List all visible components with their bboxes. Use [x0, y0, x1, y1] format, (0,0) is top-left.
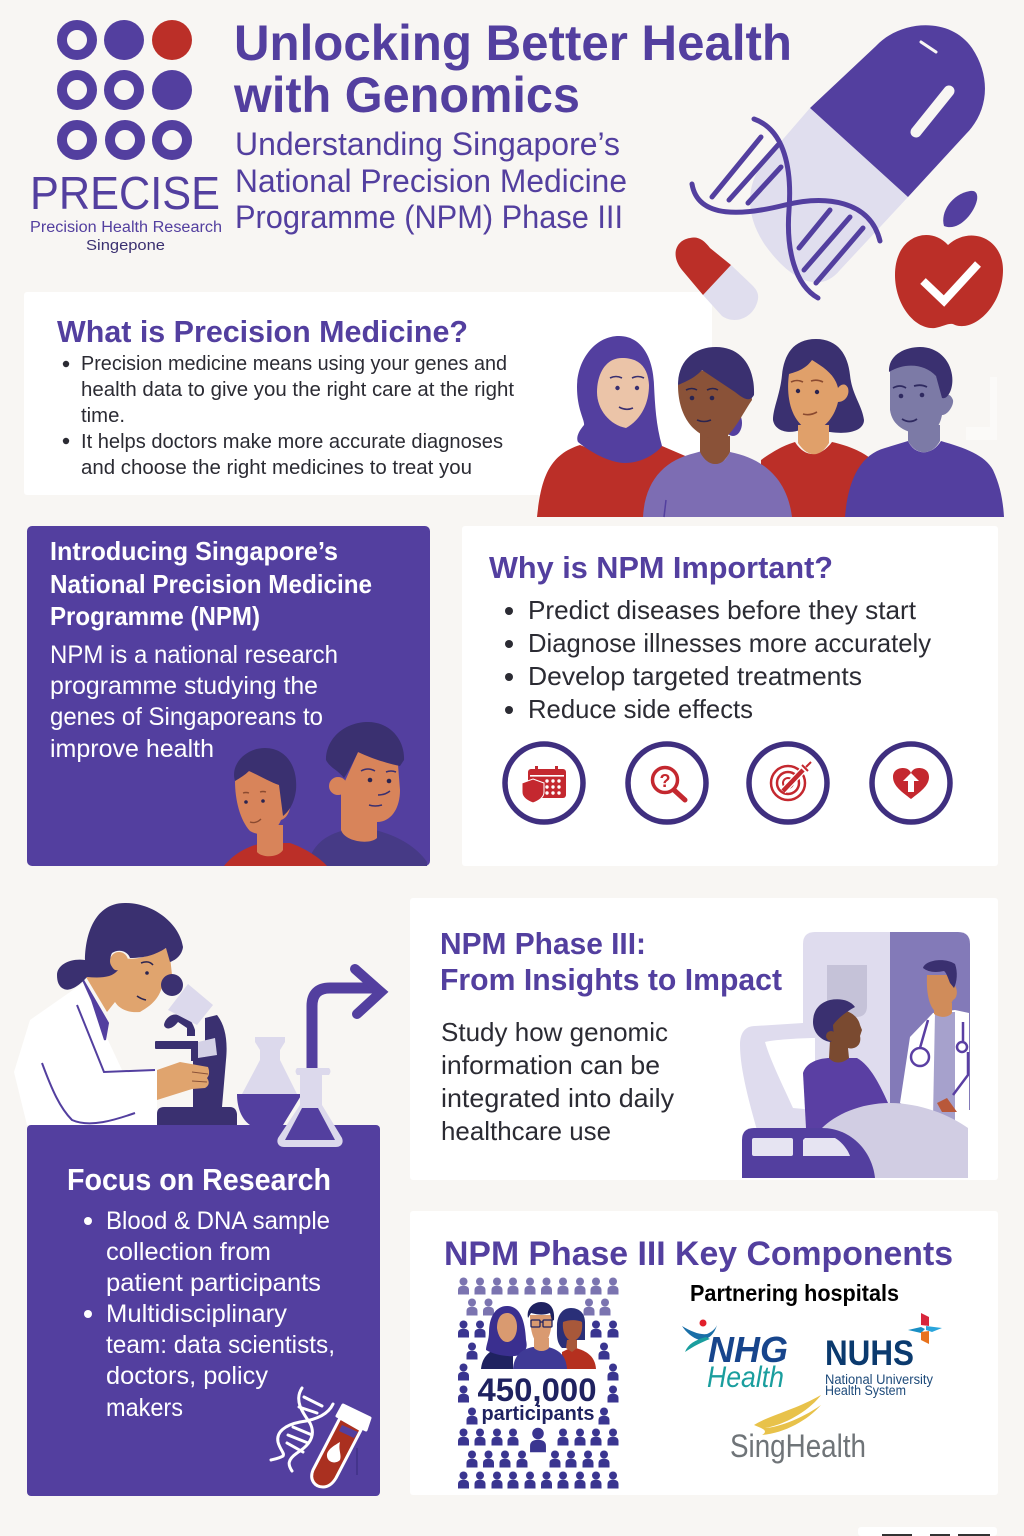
- logo: NUHS: NUHS: [825, 1334, 914, 1373]
- logo: NHG Health: NHG: [708, 1329, 788, 1370]
- list: research focus: [84, 1207, 335, 1422]
- logo: SingHealth: [730, 1395, 866, 1464]
- list: research focus: patient participants: [106, 1269, 321, 1297]
- stat: 450,000 participants: participants: [482, 1403, 594, 1425]
- list: research focus: doctors, policy: [106, 1362, 268, 1390]
- heading: why is NPM important: Why is NPM Important?: [489, 550, 833, 585]
- text: precision medicine bullets: It helps doctors make more accurate diagnoses: [81, 431, 503, 453]
- subtitle: Understanding Singapore’s: [235, 126, 620, 162]
- text: phase III description: information can be: [441, 1050, 660, 1080]
- icon: target with syringe: [749, 744, 827, 822]
- logo: SingHealth: SingHealth: [730, 1428, 866, 1464]
- icon: flask front: [277, 1068, 343, 1147]
- text: phase III description: healthcare use: [441, 1116, 611, 1146]
- text: NPM description: genes of Singaporeans to: [50, 703, 323, 731]
- text: precision medicine bullets: and choose the right medicines to treat you: [81, 457, 472, 479]
- panel: key components: [410, 1211, 998, 1495]
- text: precision medicine bullets: Precision medicine means using your genes and: [81, 353, 507, 375]
- heading: from insights to impact: From Insights to Impact: [440, 962, 782, 997]
- heading: from insights to impact: [440, 926, 782, 997]
- heading: introducing NPM: Programme (NPM): [50, 601, 260, 631]
- text: phase III description: integrated into daily: [441, 1083, 674, 1113]
- panel: introducing NPM: [27, 526, 430, 866]
- text: phase III description: Study how genomic: [441, 1017, 668, 1047]
- icon: DNA and blood tube: [271, 1388, 370, 1487]
- list: NPM benefits: Develop targeted treatments: [528, 661, 862, 691]
- illustration: scientist with microscope: [14, 903, 237, 1125]
- panel: focus on research: [27, 1068, 380, 1496]
- heading: focus on research: Focus on Research: [67, 1162, 331, 1197]
- text: precision medicine bullets: time.: [81, 405, 125, 427]
- panel: why is NPM important: [462, 526, 998, 866]
- list: research focus: collection from: [106, 1238, 271, 1266]
- heading: key components: NPM Phase III Key Components: [444, 1235, 953, 1273]
- icon: magnifier with question mark: ?: [660, 771, 670, 791]
- list: NPM benefits: [505, 595, 931, 724]
- list: research focus: Blood & DNA sample: [106, 1207, 330, 1235]
- title: with Genomics: [233, 67, 580, 123]
- logo: PRECISE: Precision Health Research: [30, 219, 222, 236]
- list: NPM benefits: Diagnose illnesses more accurately: [528, 628, 931, 658]
- icon: magnifier with question mark: [628, 744, 706, 822]
- icon: calendar with shield: [505, 744, 583, 822]
- heading: what is precision medicine: What is Precision Medicine?: [57, 314, 468, 349]
- list: NPM benefits: Reduce side effects: [528, 694, 753, 724]
- subtitle: National Precision Medicine: [235, 163, 627, 199]
- illustration: two people: [224, 722, 427, 866]
- stat: 450,000 participants: 450,000: [478, 1372, 596, 1408]
- icon: heart with up arrow: [872, 744, 950, 822]
- list: research focus: Multidisciplinary: [106, 1300, 287, 1328]
- text: precision medicine bullets: [63, 353, 514, 479]
- panel: what is precision medicine: [24, 292, 712, 495]
- illustration: doctor and patient in hospital: [740, 932, 970, 1178]
- illustration: three participants: [481, 1302, 596, 1369]
- illustration: capsule and DNA: [692, 25, 985, 298]
- text: phase III description: [441, 1017, 674, 1146]
- logo: PRECISE: PRECISE: [30, 167, 220, 219]
- illustration: four diverse people: [537, 336, 1004, 517]
- text: NPM description: improve health: [50, 735, 214, 763]
- logo: NUHS: National University: [825, 1372, 933, 1387]
- subtitle: Programme (NPM) Phase III: [235, 199, 623, 235]
- text: precision medicine bullets: health data to give you the right care at the right: [81, 379, 514, 401]
- heading: introducing NPM: Introducing Singapore’s: [50, 536, 338, 566]
- logo: NHG Health: [682, 1320, 788, 1394]
- chart: 450,000 participants pictogram: [458, 1278, 618, 1488]
- title: [233, 15, 792, 123]
- subtitle: [235, 126, 627, 235]
- logo: NUHS: Health System: [825, 1383, 906, 1398]
- text: NPM description: programme studying the: [50, 672, 318, 700]
- cropped card at bottom edge: [858, 1527, 997, 1536]
- text: NPM description: [50, 641, 338, 763]
- logo: PRECISE: Singepone: [86, 237, 165, 254]
- text: NPM description: NPM is a national research: [50, 641, 338, 669]
- title: Unlocking Better Health: [234, 15, 792, 71]
- icon: lab flasks with arrow: [237, 969, 381, 1125]
- heading: introducing NPM: [50, 536, 372, 631]
- list: research focus: makers: [106, 1394, 183, 1422]
- logo: PRECISE: [30, 20, 222, 254]
- heading: introducing NPM: National Precision Medicine: [50, 569, 372, 599]
- list: research focus: team: data scientists,: [106, 1331, 335, 1359]
- subheading: partnering hospitals: Partnering hospitals: [690, 1280, 899, 1306]
- logo: NHG Health: Health: [707, 1361, 784, 1394]
- heading: from insights to impact: NPM Phase III:: [440, 926, 646, 961]
- logo: NUHS: [825, 1313, 942, 1398]
- stat: 450,000 participants: [478, 1372, 596, 1425]
- icon: small capsule: [676, 237, 758, 320]
- list: NPM benefits: Predict diseases before they start: [528, 595, 917, 625]
- panel: NPM phase III: [410, 898, 998, 1180]
- icon: apple with check: [895, 191, 1003, 328]
